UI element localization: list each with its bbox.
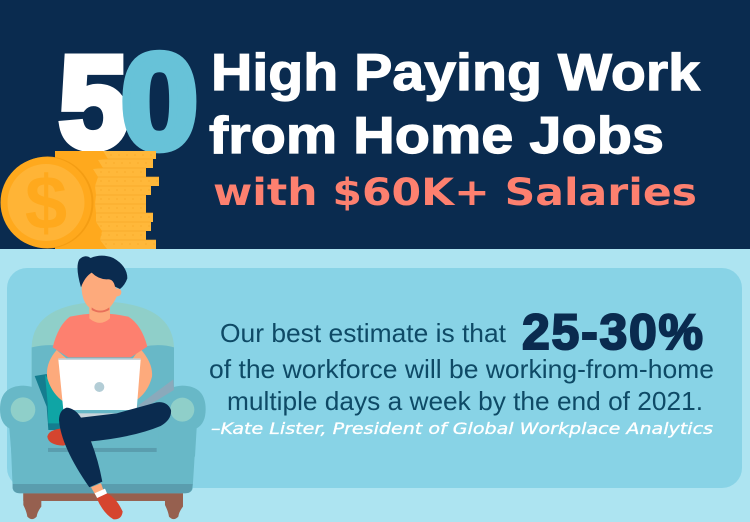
- cushion: [35, 374, 63, 430]
- armrests: [0, 386, 48, 457]
- armchair seat: [10, 423, 197, 493]
- stack shadow: [55, 151, 108, 249]
- icon: dollar coin: [0, 156, 94, 248]
- subtitle: with $60K+ Salaries: [213, 171, 697, 214]
- panel: quote: [7, 268, 742, 488]
- statistic: 25-30%: [522, 304, 703, 360]
- attribution: –Kate Lister, President of Global Workplace Analytics: [211, 419, 713, 438]
- near foot: [91, 483, 104, 498]
- number 50: 0: [121, 26, 198, 177]
- title: from Home Jobs: [209, 107, 664, 165]
- quote text: of the workforce will be working-from-home: [209, 354, 714, 384]
- title: [209, 44, 700, 165]
- icon: coin stack: [55, 151, 159, 249]
- head: [82, 271, 117, 312]
- header background: [0, 0, 750, 249]
- icon: dollar coin: $: [25, 161, 67, 246]
- illustration: person on armchair: [0, 256, 206, 519]
- far leg: [87, 427, 93, 442]
- hair: [78, 256, 127, 289]
- far shoe: [47, 428, 70, 446]
- quote text: multiple days a week by the end of 2021.: [227, 386, 703, 416]
- arms: [47, 350, 68, 402]
- crossed leg: [59, 402, 171, 487]
- title: High Paying Work: [211, 44, 700, 102]
- quote text: Our best estimate is that: [220, 318, 507, 348]
- shirt: [53, 313, 147, 357]
- quote text: [209, 318, 714, 416]
- laptop: [58, 359, 141, 410]
- neck: [89, 305, 110, 323]
- armchair back: [32, 302, 174, 417]
- lower section background: [0, 249, 750, 522]
- number 50: 5: [59, 29, 128, 175]
- number 50: [59, 26, 198, 177]
- armchair legs: [23, 492, 183, 519]
